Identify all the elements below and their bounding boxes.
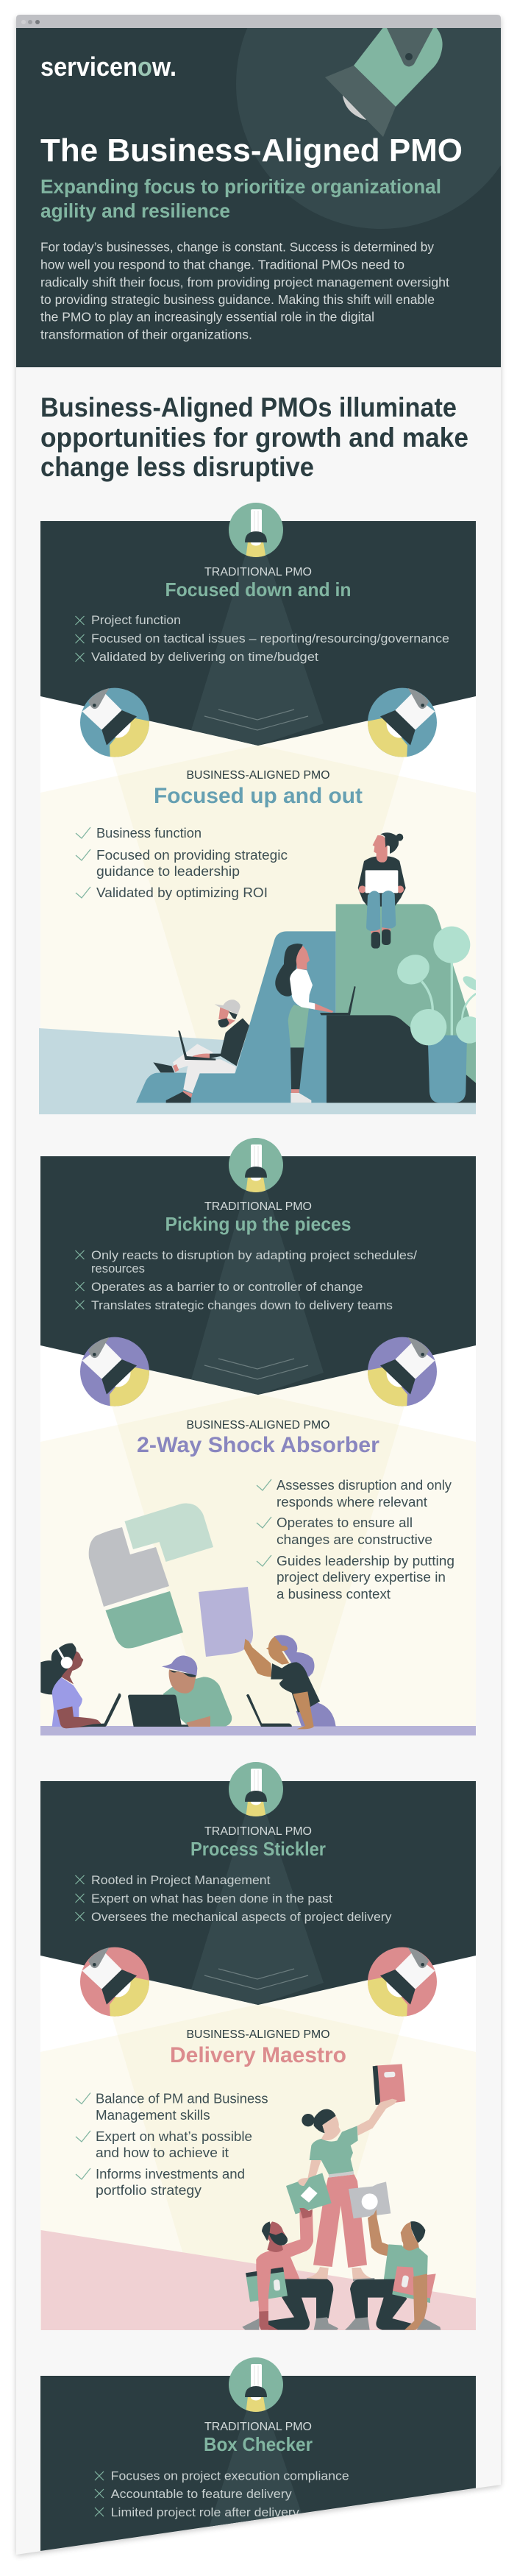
traditional PMO list: Oversees the mechanical aspects of project delivery [91, 1911, 392, 1924]
icon: left spotlight [80, 688, 152, 760]
icon: left spotlight [80, 1337, 152, 1409]
arrow: chevrons [204, 710, 308, 730]
icon: right spotlight [365, 688, 437, 760]
business-aligned PMO list: project delivery expertise in [277, 1570, 446, 1585]
intro paragraph: transformation of their organizations. [40, 327, 252, 342]
business-aligned PMO list: Expert on what’s possible [96, 2129, 252, 2144]
business-aligned PMO heading: Delivery Maestro [170, 2043, 346, 2067]
business-aligned PMO heading: BUSINESS-ALIGNED PMO [187, 1419, 329, 1432]
business-aligned PMO list: Balance of PM and Business [96, 2092, 268, 2106]
panel 4: box checker [40, 2357, 476, 2551]
arrow: chevrons [204, 1969, 308, 1989]
traditional PMO list: Validated by delivering on time/budget [91, 651, 318, 664]
traditional PMO list: Limited project role after delivery [111, 2506, 300, 2519]
traditional PMO list: resources [91, 1262, 145, 1275]
business-aligned PMO list: Validated by optimizing ROI [96, 885, 268, 900]
intro paragraph: to providing strategic business guidance. Making this shift will enable [40, 292, 435, 307]
intro paragraph: the PMO to play an increasingly essential role in the digital [40, 310, 374, 325]
business-aligned PMO list [76, 2092, 268, 2198]
business-aligned PMO list: Focused on providing strategic [96, 848, 288, 863]
illustration: three people working on office furniture [136, 832, 483, 1103]
subtitle [40, 175, 441, 222]
header spotlight and lamp [236, 28, 501, 229]
section heading: change less disruptive [40, 452, 314, 482]
icon: right spotlight [365, 1947, 437, 2020]
intro paragraph: how well you respond to that change. Traditional PMOs need to [40, 258, 404, 272]
traditional PMO heading: Picking up the pieces [165, 1213, 352, 1235]
traditional PMO list [75, 1874, 392, 1924]
traditional PMO heading [204, 2421, 313, 2455]
icon: top spotlight [229, 2357, 283, 2414]
business-aligned PMO heading: BUSINESS-ALIGNED PMO [187, 2028, 329, 2041]
intro paragraph [40, 240, 449, 342]
browser title bar [16, 15, 501, 28]
panel 2: disruption [40, 1138, 476, 1735]
business-aligned PMO list: responds where relevant [277, 1495, 427, 1510]
traditional PMO list: Focuses on project execution compliance [111, 2470, 349, 2483]
business-aligned PMO heading [154, 769, 363, 808]
business-aligned PMO heading [137, 1419, 379, 1457]
traditional PMO list: Operates as a barrier to or controller of change [91, 1281, 363, 1294]
traditional PMO list: Project function [91, 614, 181, 627]
business-aligned PMO list [76, 826, 288, 900]
traditional PMO list [75, 1249, 417, 1312]
section heading [40, 392, 468, 482]
business-aligned PMO list: and how to achieve it [96, 2145, 229, 2160]
traditional PMO heading: TRADITIONAL PMO [204, 2421, 312, 2433]
traditional PMO list: Focused on tactical issues – reporting/resourcing/governance [91, 632, 449, 645]
business-aligned PMO list [257, 1478, 454, 1602]
ServiceNow logo: servicenow. [40, 52, 177, 82]
business-aligned PMO list: Guides leadership by putting [277, 1554, 454, 1568]
header panel [16, 28, 501, 367]
traditional PMO list: Expert on what has been done in the past [91, 1892, 332, 1906]
traditional PMO heading: TRADITIONAL PMO [204, 1200, 312, 1213]
traditional PMO heading [165, 566, 352, 601]
traditional PMO heading [165, 1200, 352, 1235]
icon: left spotlight [80, 1947, 152, 2020]
subtitle: Expanding focus to prioritize organizational [40, 175, 441, 197]
business-aligned PMO list: guidance to leadership [96, 864, 240, 879]
business-aligned PMO heading: BUSINESS-ALIGNED PMO [187, 769, 329, 782]
traditional PMO list: Rooted in Project Management [91, 1874, 271, 1887]
traditional PMO heading: Process Stickler [190, 1838, 326, 1860]
business-aligned PMO heading: 2-Way Shock Absorber [137, 1433, 379, 1457]
traditional PMO heading [190, 1825, 326, 1860]
business-aligned PMO list: Informs investments and [96, 2167, 245, 2182]
panel 3: delivery [40, 1762, 476, 2330]
business-aligned PMO heading [170, 2028, 346, 2067]
icon: top spotlight [229, 503, 283, 559]
business-aligned PMO list: a business context [277, 1587, 391, 1602]
spotlight beam [209, 2410, 302, 2527]
illustration: three colleagues at laptops [40, 1635, 336, 1729]
business-aligned PMO heading: Focused up and out [154, 784, 363, 808]
traditional PMO heading: Focused down and in [165, 578, 352, 601]
traditional PMO list [95, 2470, 349, 2519]
arrow: chevrons [204, 1359, 308, 1379]
business-aligned PMO list: Management skills [96, 2108, 210, 2123]
traditional PMO heading: Box Checker [204, 2433, 313, 2455]
business-aligned PMO list: portfolio strategy [96, 2183, 202, 2198]
section heading: Business-Aligned PMOs illuminate [40, 392, 457, 422]
table bar [40, 1726, 476, 1735]
panel 1: focus [39, 503, 483, 1114]
intro paragraph: For today’s businesses, change is constant. Success is determined by [40, 240, 434, 255]
traditional PMO list: Accountable to feature delivery [111, 2488, 293, 2501]
title: The Business-Aligned PMO [40, 132, 463, 169]
illustration: three people passing folders [242, 2064, 441, 2330]
section heading: opportunities for growth and make [40, 422, 468, 453]
icon: top spotlight [229, 1762, 283, 1819]
business-aligned PMO list: Business function [96, 826, 202, 841]
traditional PMO list: Translates strategic changes down to delivery teams [91, 1299, 393, 1312]
subtitle: agility and resilience [40, 200, 230, 222]
business-aligned PMO list: changes are constructive [277, 1532, 432, 1547]
traditional PMO list: Only reacts to disruption by adapting project schedules/ [91, 1249, 417, 1262]
illustration: puzzle pieces [89, 1504, 253, 1657]
business-aligned PMO list: Operates to ensure all [277, 1515, 413, 1530]
business-aligned PMO list: Assesses disruption and only [277, 1478, 452, 1493]
icon: top spotlight [229, 1138, 283, 1195]
traditional PMO list [75, 614, 449, 664]
icon: right spotlight [365, 1337, 437, 1409]
intro paragraph: radically shift their focus, from providing project management oversight [40, 275, 449, 289]
traditional PMO heading: TRADITIONAL PMO [204, 1825, 312, 1838]
traditional PMO heading: TRADITIONAL PMO [204, 566, 312, 578]
